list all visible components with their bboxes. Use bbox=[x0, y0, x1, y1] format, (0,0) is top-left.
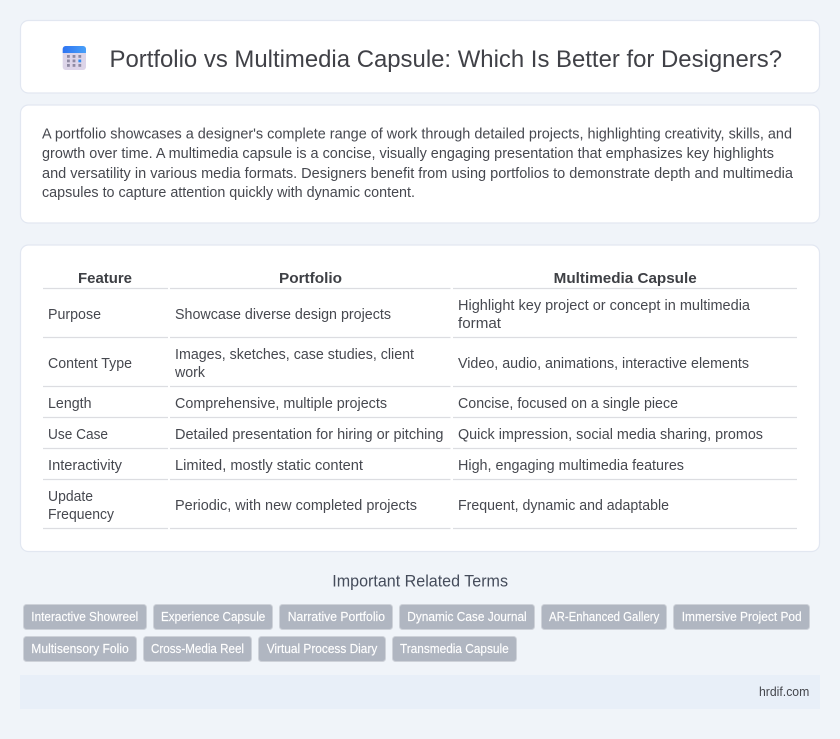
text block: intro paragraph: and versatility in various media formats. Designers benefit from using portfolios to demonstrate depth and multimedia bbox=[42, 166, 794, 182]
table row: content type: Video, audio, animations, interactive elements bbox=[458, 356, 749, 372]
table row: update frequency bbox=[43, 489, 797, 528]
table header row: Feature bbox=[78, 271, 132, 287]
tag bbox=[400, 604, 534, 630]
tag bbox=[144, 636, 252, 662]
table row: update frequency: Periodic, with new completed projects bbox=[175, 498, 417, 514]
icon: calendar bbox=[63, 46, 86, 70]
panel: intro text bbox=[20, 105, 820, 223]
table row: content type: Images, sketches, case studies, client bbox=[175, 347, 414, 363]
tag bbox=[392, 636, 516, 662]
table row: length: Length bbox=[48, 396, 92, 412]
title: Portfolio vs Multimedia Capsule: Which Is Better for Designers? bbox=[110, 46, 782, 73]
table header row: Portfolio bbox=[279, 271, 342, 287]
table row: purpose: format bbox=[458, 316, 501, 332]
tag: Immersive Project Pod bbox=[682, 609, 802, 624]
panel: related term tags bbox=[24, 604, 810, 662]
tag: Experience Capsule bbox=[161, 609, 265, 624]
table header row: Multimedia Capsule bbox=[554, 271, 697, 287]
tag: AR-Enhanced Gallery bbox=[549, 609, 660, 624]
footer bbox=[20, 675, 820, 709]
text block: intro paragraph: capsules to capture attention quickly with dynamic content. bbox=[42, 185, 415, 201]
table row: purpose: Showcase diverse design projects bbox=[175, 307, 391, 323]
text block: intro paragraph: A portfolio showcases a designer's complete range of work through detailed projects, highlighting creativity, skills, and bbox=[42, 126, 792, 142]
panel: header bbox=[20, 20, 820, 93]
table header row bbox=[43, 271, 797, 288]
footer: hrdif.com bbox=[759, 685, 809, 699]
text block: intro paragraph: growth over time. A multimedia capsule is a concise, visually engaging presentation that emphasizes key highlights bbox=[42, 146, 774, 162]
tag bbox=[542, 604, 666, 630]
table row: use case bbox=[43, 427, 797, 448]
table row: content type bbox=[43, 347, 797, 386]
tag: Narrative Portfolio bbox=[288, 609, 385, 624]
tag: Cross-Media Reel bbox=[151, 641, 244, 656]
tag bbox=[24, 604, 146, 630]
table row: length: Concise, focused on a single piece bbox=[458, 396, 678, 412]
table row: use case: Detailed presentation for hiring or pitching bbox=[175, 427, 444, 443]
table row: update frequency: Frequency bbox=[48, 507, 115, 523]
table row: update frequency: Frequent, dynamic and adaptable bbox=[458, 498, 669, 514]
tag bbox=[674, 604, 810, 630]
table row: use case: Quick impression, social media sharing, promos bbox=[458, 427, 763, 443]
table row: update frequency: Update bbox=[48, 489, 93, 505]
tag bbox=[258, 636, 386, 662]
tag: Multisensory Folio bbox=[31, 641, 129, 656]
table row: purpose: Highlight key project or concept in multimedia bbox=[458, 298, 751, 314]
tag: Virtual Process Diary bbox=[267, 641, 378, 656]
table row: length bbox=[43, 396, 797, 418]
table row: purpose bbox=[43, 298, 797, 338]
table row: interactivity: Limited, mostly static content bbox=[175, 458, 363, 474]
table row: interactivity: Interactivity bbox=[48, 458, 123, 474]
table row: content type: Content Type bbox=[48, 356, 132, 372]
tag bbox=[154, 604, 272, 630]
table row: content type: work bbox=[174, 365, 206, 381]
table row: length: Comprehensive, multiple projects bbox=[175, 396, 387, 412]
tag bbox=[280, 604, 392, 630]
heading: important related terms: Important Related Terms bbox=[332, 572, 508, 590]
table row: purpose: Purpose bbox=[48, 307, 101, 323]
table row: interactivity: High, engaging multimedia features bbox=[458, 458, 684, 474]
table row: use case: Use Case bbox=[48, 427, 108, 443]
panel: comparison table bbox=[20, 245, 820, 552]
tag: Dynamic Case Journal bbox=[407, 609, 527, 624]
tag: Transmedia Capsule bbox=[400, 641, 509, 656]
tag bbox=[24, 636, 136, 662]
table row: interactivity bbox=[43, 458, 797, 480]
text block: intro paragraph bbox=[42, 126, 794, 201]
tag: Interactive Showreel bbox=[31, 609, 138, 624]
